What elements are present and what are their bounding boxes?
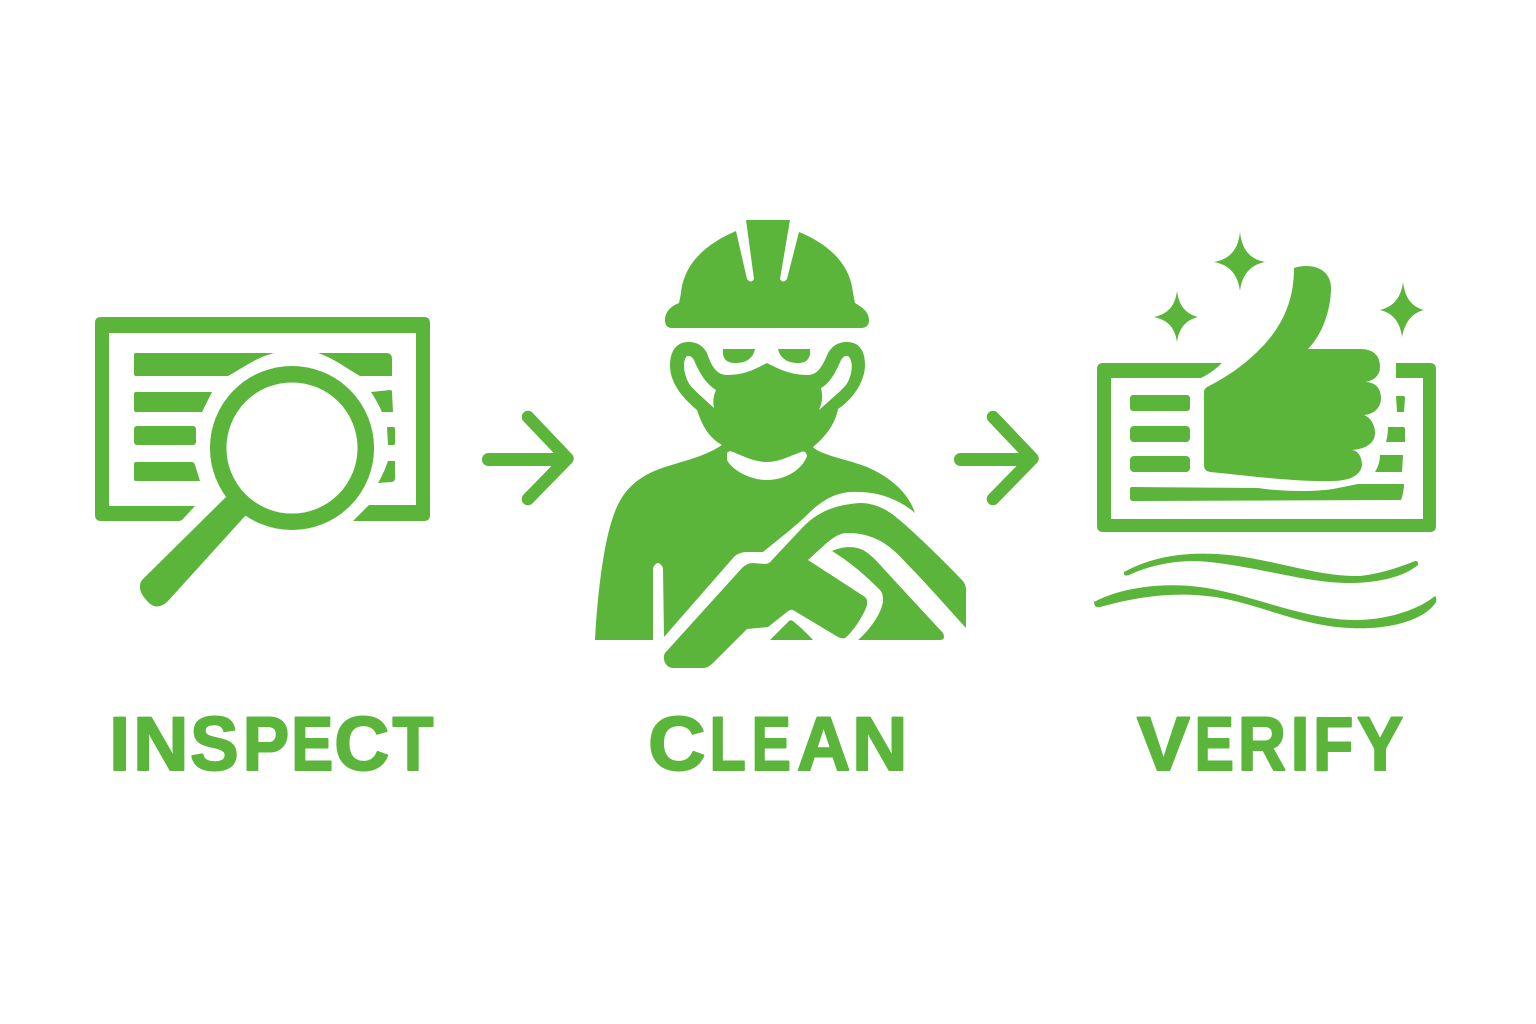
safety glasses: right lens: [778, 349, 810, 363]
label: CLEAN: N: [852, 702, 908, 787]
label: CLEAN: C: [648, 702, 706, 787]
arrow: clean to verify: [960, 417, 1032, 499]
document frame: [95, 317, 430, 521]
label: VERIFY: E: [1194, 702, 1234, 787]
magnifying glass handle: [140, 496, 246, 607]
safety glasses: left lens: [723, 349, 755, 363]
label: INSPECT: S: [190, 702, 239, 787]
label: INSPECT: T: [392, 702, 433, 787]
sparkle: top: [1214, 232, 1265, 291]
document text lines: [1130, 395, 1405, 501]
label: INSPECT: I: [109, 702, 130, 787]
magnifying glass lens: [218, 374, 366, 522]
sparkle: right: [1380, 282, 1424, 337]
arrow: inspect to clean: [488, 417, 568, 499]
label: VERIFY: V: [1137, 702, 1190, 787]
thumbs up hand: [1204, 266, 1381, 481]
sparkle: left: [1154, 291, 1198, 342]
label: CLEAN: E: [752, 702, 791, 787]
label: VERIFY: R: [1238, 702, 1286, 787]
torso lower right piece: [832, 547, 944, 640]
label: CLEAN: L: [710, 702, 746, 787]
label: VERIFY: I: [1291, 702, 1310, 787]
torso lower triangle: [770, 620, 813, 640]
label: VERIFY: Y: [1357, 702, 1403, 787]
label: INSPECT: P: [243, 702, 289, 787]
head, mask and torso: [595, 342, 915, 640]
shine line: lower wave: [1094, 585, 1436, 628]
arm holding tool: [664, 503, 966, 668]
label: CLEAN: A: [797, 702, 850, 787]
icon: document under magnifying glass: [95, 317, 430, 607]
label: VERIFY: F: [1313, 702, 1353, 787]
label: INSPECT: C: [334, 702, 389, 787]
label: INSPECT: E: [291, 702, 333, 787]
document frame: [1097, 363, 1436, 532]
icon: worker with hard hat, mask and tool: [595, 220, 966, 668]
hard hat: [665, 220, 869, 328]
shine line: upper wave: [1124, 554, 1418, 583]
label: INSPECT: N: [133, 702, 189, 787]
document text lines: [134, 353, 395, 483]
icon: document with thumbs up and sparkles: [1094, 232, 1436, 628]
